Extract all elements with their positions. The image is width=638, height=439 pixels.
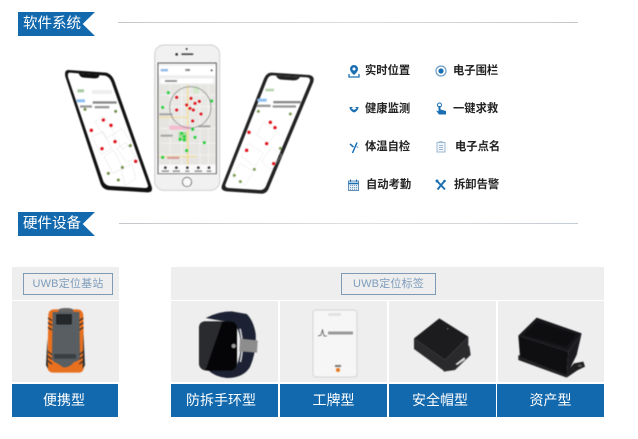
caption: badge type	[280, 384, 387, 417]
feature: automatic attendance	[348, 178, 411, 191]
caption: portable type	[12, 384, 118, 417]
feature: real-time location: 实时位置	[365, 65, 410, 77]
icon: helmet tag box	[413, 318, 472, 372]
icon: wristband device	[198, 310, 258, 379]
caption: safety helmet type: 安全帽型	[412, 392, 468, 408]
caption: safety helmet type	[389, 384, 496, 417]
label: UWB tags: UWB定位标签	[353, 278, 424, 290]
panel: UWB tags	[171, 267, 604, 382]
caption: asset type	[497, 384, 604, 417]
label: UWB base station: UWB定位基站	[32, 278, 104, 290]
icon: portable orange device	[45, 307, 86, 374]
caption: badge type: 工牌型	[312, 392, 354, 408]
heading: hardware devices: 硬件设备	[23, 216, 81, 232]
feature: removal alarm	[436, 178, 499, 191]
phones illustration	[64, 44, 314, 194]
center phone	[155, 45, 220, 190]
heading: hardware devices	[18, 212, 95, 236]
feature: body temperature check	[350, 140, 410, 154]
feature: one-key rescue: 一键求救	[453, 103, 498, 115]
feature: electronic roll call	[436, 140, 500, 153]
caption: anti-removal wristband type: 防拆手环型	[186, 392, 256, 408]
feature: electronic roll call: 电子点名	[455, 141, 500, 153]
icon: asset tag box	[518, 317, 586, 378]
feature: health monitoring: 健康监测	[365, 103, 410, 115]
left tilted phone	[65, 70, 152, 192]
panel: UWB base station	[12, 267, 119, 382]
feature: real-time location	[348, 64, 410, 78]
caption: anti-removal wristband type	[171, 384, 278, 417]
heading: software system	[18, 12, 95, 36]
caption: asset type: 资产型	[530, 392, 572, 408]
feature: one-key rescue	[436, 102, 498, 115]
icon: badge card	[312, 309, 358, 378]
feature: health monitoring	[350, 102, 410, 115]
feature: electronic fence	[435, 64, 498, 77]
feature: removal alarm: 拆卸告警	[454, 179, 499, 191]
feature: electronic fence: 电子围栏	[453, 65, 498, 77]
feature: body temperature check: 体温自检	[365, 141, 410, 153]
label: UWB tags	[341, 273, 436, 295]
feature: automatic attendance: 自动考勤	[366, 179, 411, 191]
caption: portable type: 便携型	[43, 392, 85, 408]
label: UWB base station	[23, 273, 113, 295]
right tilted phone	[222, 73, 314, 194]
heading: software system: 软件系统	[23, 16, 81, 32]
